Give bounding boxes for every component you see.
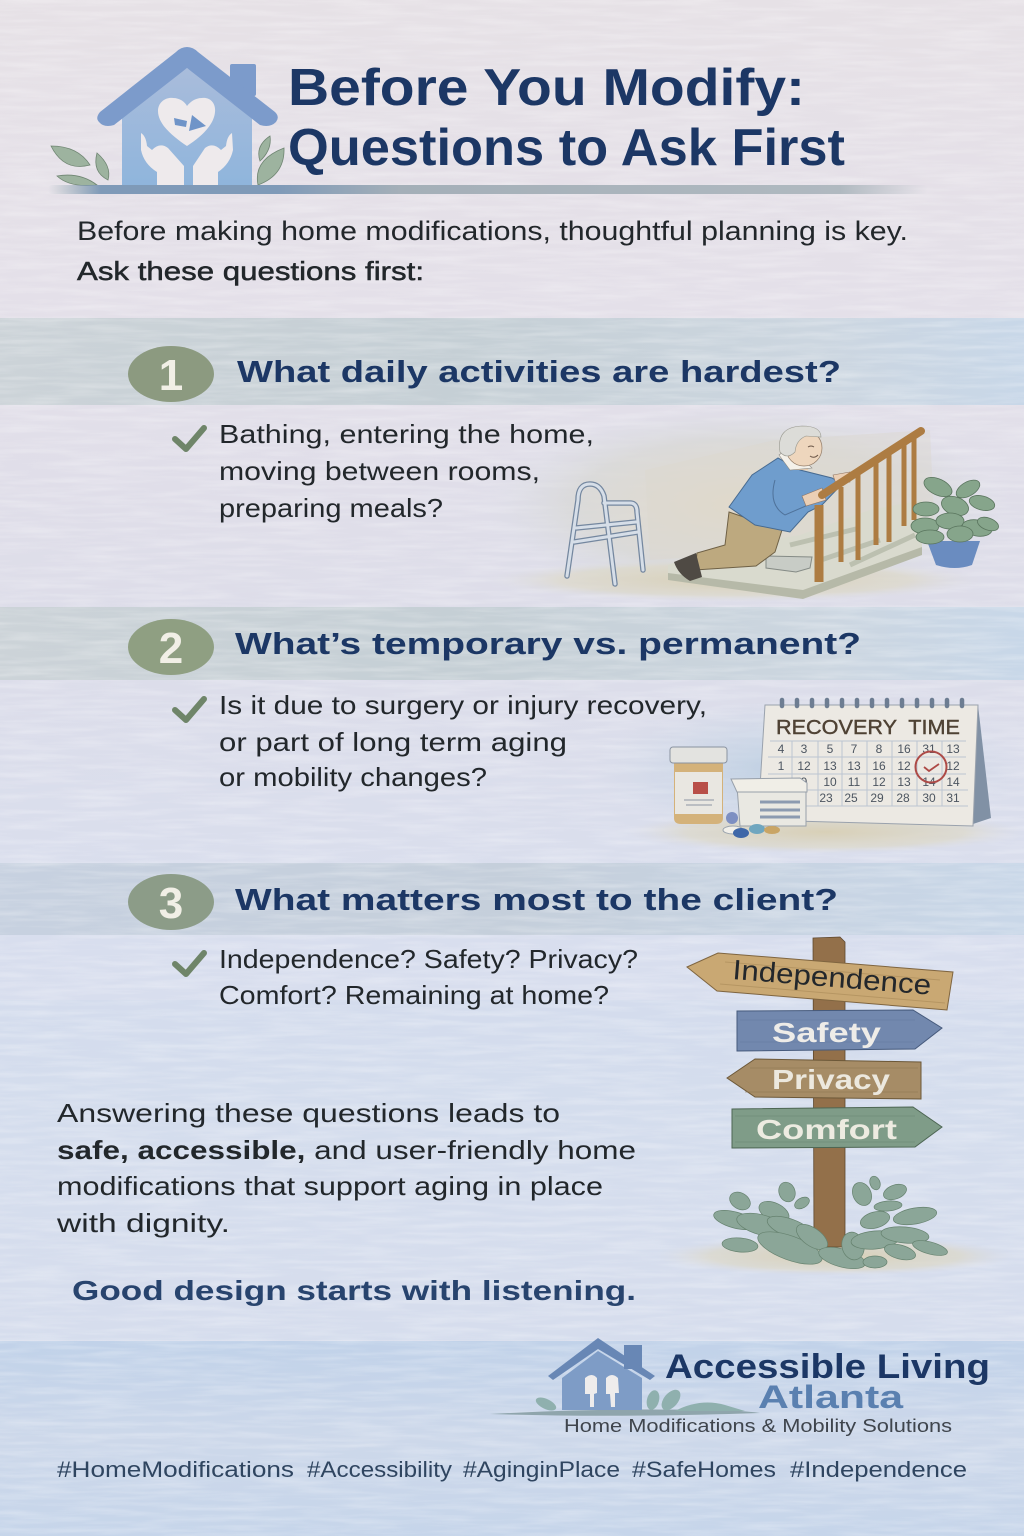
foliage	[712, 1175, 949, 1273]
stair railing	[819, 431, 921, 582]
number badge 1	[128, 346, 214, 402]
sign: Safety: Safety	[772, 1017, 882, 1048]
calendar numbers: 4	[778, 742, 785, 756]
closing paragraph	[56, 1098, 636, 1238]
calendar numbers: 11	[848, 775, 861, 789]
calendar numbers: 13	[823, 759, 837, 773]
icon: house with heart and hands	[51, 47, 284, 186]
logo ground line	[490, 1410, 760, 1416]
calendar numbers: 30	[922, 791, 936, 805]
sign: Comfort: Comfort	[756, 1114, 897, 1145]
calendar numbers: 14	[946, 775, 960, 789]
number badge 2: 2	[159, 624, 183, 673]
illustration: recovery calendar and medication	[595, 700, 1024, 854]
post	[813, 937, 845, 1247]
closing paragraph: safe, accessible, and user-friendly home	[57, 1135, 636, 1165]
band: question 2	[0, 607, 1024, 680]
answer text 3	[219, 944, 638, 1010]
heart	[158, 98, 215, 146]
sign: Privacy	[727, 1059, 921, 1099]
checkmark 2	[175, 699, 204, 720]
floor	[485, 558, 985, 602]
calendar numbers: 10	[823, 775, 837, 789]
logo chimney	[624, 1345, 642, 1369]
logo roof	[548, 1338, 655, 1380]
answer text 2: or part of long term aging	[219, 727, 567, 757]
calendar numbers: 12	[946, 759, 960, 773]
head	[786, 430, 822, 466]
neck	[788, 455, 810, 470]
heart inner mark	[174, 115, 206, 131]
circled date	[916, 752, 946, 782]
brand tagline: Home Modifications & Mobility Solutions	[564, 1416, 952, 1436]
stone steps	[668, 500, 922, 597]
calendar numbers: 12	[797, 759, 811, 773]
table surface	[625, 810, 1024, 854]
watercolor wash	[485, 405, 1005, 605]
hands	[141, 133, 233, 186]
answer text 3: Comfort? Remaining at home?	[219, 980, 609, 1010]
calendar numbers: 3	[801, 742, 808, 756]
answer text 2	[219, 690, 707, 792]
answer text 1	[219, 419, 594, 523]
logo leaves	[534, 1386, 745, 1414]
pills	[723, 812, 780, 838]
answer text 1: moving between rooms,	[219, 456, 540, 486]
calendar grid	[768, 741, 968, 806]
title: Questions to Ask First	[288, 119, 845, 177]
band: footer	[0, 1341, 1024, 1536]
house body	[122, 68, 252, 186]
intro text: Ask these questions first:	[77, 256, 424, 286]
calendar numbers: 8	[876, 742, 883, 756]
calendar numbers: 28	[896, 791, 910, 805]
sign: Privacy: Privacy	[772, 1064, 891, 1095]
hashtags: #Accessibility	[307, 1457, 453, 1482]
checkmark 1	[175, 428, 204, 449]
trousers	[695, 512, 782, 570]
heading: question 2: What’s temporary vs. permanent?	[235, 626, 861, 661]
calendar rings	[782, 700, 962, 706]
hashtags	[57, 1457, 967, 1482]
logo figures	[585, 1375, 619, 1407]
calendar numbers: 13	[897, 775, 911, 789]
leaves left	[51, 146, 109, 186]
answer text 1: Bathing, entering the home,	[219, 419, 594, 449]
sweater	[729, 458, 842, 532]
calendar page	[758, 705, 978, 826]
title underline	[48, 185, 928, 194]
calendar numbers: 9	[801, 775, 808, 789]
answer text 2: Is it due to surgery or injury recovery,	[219, 690, 707, 720]
brand name: Accessible Living	[665, 1348, 990, 1386]
medicine box	[731, 778, 807, 826]
intro text	[77, 216, 908, 286]
watercolor wash	[595, 700, 1024, 840]
face	[808, 446, 818, 457]
band: question 1	[0, 318, 1024, 405]
calendar numbers: 1	[778, 759, 785, 773]
number badge 2	[128, 619, 214, 675]
calendar numbers: 31	[922, 742, 936, 756]
footer logo	[490, 1338, 990, 1436]
calendar numbers: 29	[870, 791, 884, 805]
pill bottle	[670, 747, 727, 824]
roof	[97, 47, 278, 126]
walker outline	[567, 484, 643, 584]
heading: question 3: What matters most to the client?	[235, 882, 838, 917]
ground wash	[655, 1236, 1015, 1276]
answer text 3: Independence? Safety? Privacy?	[219, 944, 638, 974]
intro text: Before making home modifications, thoughtful planning is key.	[77, 216, 908, 246]
leaves right	[257, 136, 284, 185]
chimney	[230, 64, 256, 96]
logo house	[562, 1351, 642, 1410]
calendar numbers: 12	[897, 759, 911, 773]
illustration: signpost with values	[655, 937, 1015, 1276]
calendar numbers: 13	[847, 759, 861, 773]
hands	[802, 472, 850, 506]
hashtags: #AginginPlace	[463, 1457, 620, 1482]
sign: Independence: Independence	[732, 954, 932, 1001]
sign: Safety	[737, 1010, 942, 1051]
closing paragraph: Answering these questions leads to	[57, 1098, 560, 1128]
title: Before You Modify:	[288, 59, 805, 117]
wall patch	[645, 430, 935, 560]
closing paragraph: with dignity.	[56, 1208, 230, 1238]
calendar title: RECOVERY TIME	[776, 717, 960, 739]
brand city: Atlanta	[758, 1379, 903, 1415]
shoe	[674, 553, 702, 581]
answer text 2: or mobility changes?	[219, 762, 487, 792]
hashtags: #Independence	[790, 1457, 967, 1482]
collar	[779, 450, 812, 470]
calendar numbers: 25	[844, 791, 858, 805]
hair	[779, 426, 821, 456]
number badge 1: 1	[159, 351, 183, 400]
title	[288, 59, 845, 177]
number badge 3: 3	[159, 879, 183, 928]
answer text 1: preparing meals?	[219, 493, 443, 523]
calendar numbers: 16	[897, 742, 911, 756]
sign: Comfort	[732, 1107, 942, 1148]
walker tube	[567, 484, 643, 584]
tagline: Good design starts with listening.	[72, 1275, 636, 1306]
calendar numbers: 16	[872, 759, 886, 773]
hashtags: #HomeModifications	[57, 1457, 294, 1482]
sign: Independence	[687, 953, 953, 1010]
number badge 3	[128, 874, 214, 930]
arm crease	[773, 480, 808, 515]
calendar numbers	[778, 742, 960, 805]
illustration: senior climbing stairs with walker and plant	[485, 405, 1005, 605]
calendar numbers: 5	[827, 742, 834, 756]
band: question 3	[0, 863, 1024, 935]
calendar numbers: 23	[819, 791, 833, 805]
hashtags: #SafeHomes	[632, 1457, 776, 1482]
calendar numbers: 7	[851, 742, 858, 756]
potted plant	[911, 473, 1000, 568]
calendar numbers: 12	[872, 775, 886, 789]
closing paragraph: modifications that support aging in place	[57, 1171, 603, 1201]
heading: question 1: What daily activities are hardest?	[237, 354, 841, 389]
calendar numbers: 14	[922, 775, 936, 789]
book on step	[766, 556, 812, 572]
calendar numbers: 31	[946, 791, 960, 805]
checkmark 3	[175, 953, 204, 974]
calendar numbers: 13	[946, 742, 960, 756]
calendar stand	[973, 705, 991, 824]
